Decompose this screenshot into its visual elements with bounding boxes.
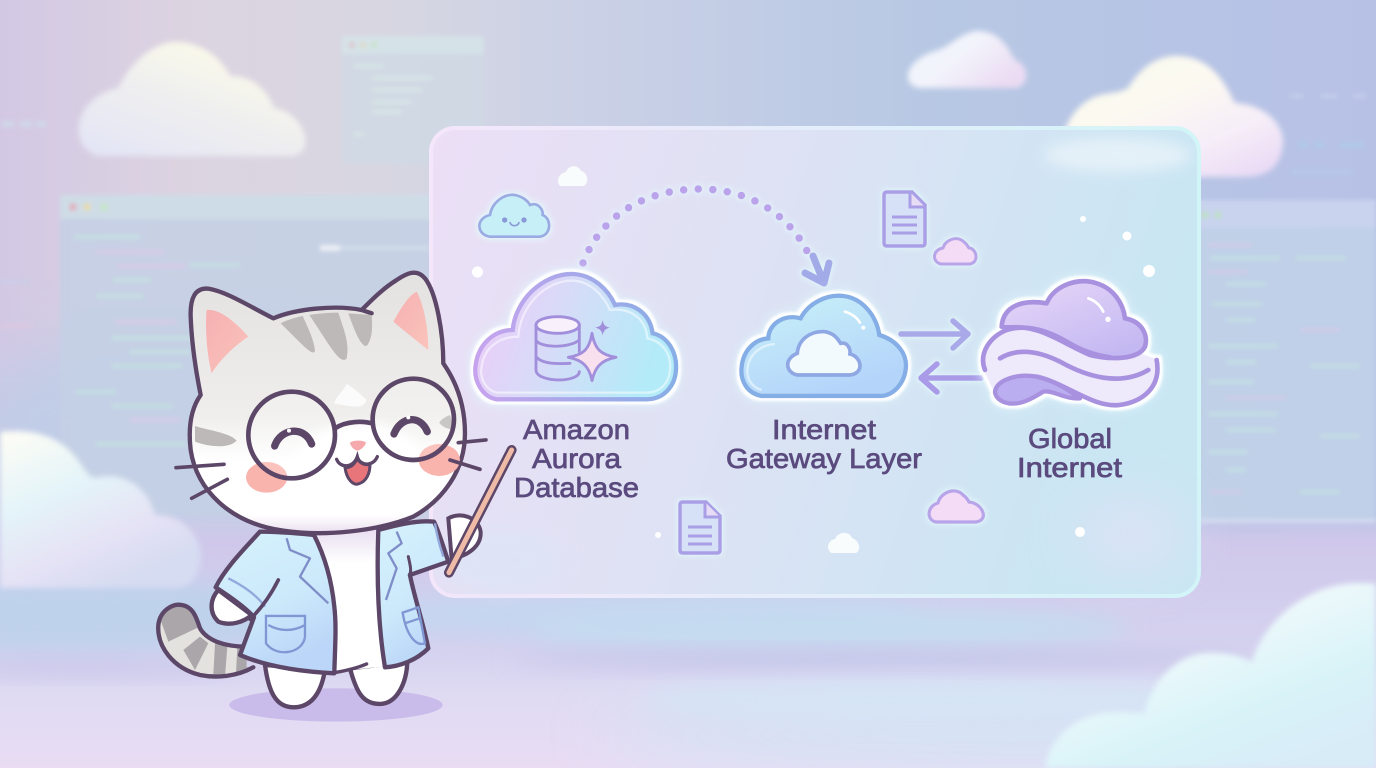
label: Internet Gateway Layer <box>726 414 922 474</box>
icon: small white cloud top <box>558 166 587 186</box>
blurred code fragments: far left <box>0 124 46 380</box>
cat tail <box>153 600 257 677</box>
inner highlight: database cloud <box>481 281 670 393</box>
cat torso <box>310 527 387 672</box>
cat muzzle highlight <box>293 423 427 510</box>
icon: small sparkle <box>595 320 610 335</box>
blurred code window: right <box>1190 200 1376 523</box>
label: Amazon Aurora Database: Amazon <box>523 414 630 445</box>
forehead white tuft <box>334 384 367 407</box>
label: Internet Gateway Layer: Gateway Layer <box>726 443 922 474</box>
arrow: gateway to internet <box>901 321 968 348</box>
icon: document bottom <box>680 502 720 553</box>
icon: database cylinder <box>536 317 579 380</box>
node: Global Internet cloud with wind swirls <box>983 281 1157 405</box>
label: Amazon Aurora Database: Database <box>514 472 639 503</box>
icon: small white cloud bottom <box>828 533 859 553</box>
cat eye right <box>394 415 427 434</box>
cat left paw <box>212 590 252 624</box>
cat cheeks <box>246 444 460 493</box>
icon: gloss on gateway cloud <box>845 312 860 323</box>
icon: document top <box>884 192 925 246</box>
ground shadow <box>229 688 443 722</box>
icon: smiling cloud <box>479 195 549 237</box>
forehead outline accent <box>362 310 372 313</box>
glass panel <box>431 128 1199 596</box>
label: Amazon Aurora Database <box>514 414 639 503</box>
label: Global Internet <box>1017 423 1122 483</box>
cat hand <box>448 515 481 558</box>
label: Global Internet: Global <box>1028 423 1112 454</box>
cat whiskers <box>176 440 486 498</box>
background cloud: bottom right <box>1045 583 1376 768</box>
cat mascot <box>153 273 512 722</box>
icon: inner white cloud <box>788 332 860 375</box>
label: Internet Gateway Layer: Internet <box>772 414 876 445</box>
cat ear right <box>393 292 428 350</box>
cat mouth <box>337 457 377 484</box>
label: Amazon Aurora Database: Aurora <box>532 443 621 474</box>
lab coat right <box>378 521 448 667</box>
node: Internet Gateway Layer cloud <box>741 296 906 396</box>
blurred code window: top <box>342 36 484 164</box>
background cloud: top left <box>79 42 305 156</box>
label: Global Internet: Internet <box>1017 452 1122 483</box>
cat legs <box>265 662 407 707</box>
blurred code window: left <box>60 195 435 515</box>
icon: pink cloud top right <box>934 239 976 264</box>
dotted arc arrow <box>583 189 829 283</box>
cat ear left <box>206 310 248 373</box>
background cloud: top right <box>1059 56 1283 177</box>
arrow: internet to gateway <box>921 364 981 392</box>
node: Amazon Aurora Database cloud <box>475 274 676 399</box>
background cloud: left <box>0 431 201 588</box>
cat eye left <box>275 429 312 446</box>
inner highlight: gateway cloud <box>747 344 775 390</box>
cat head <box>190 273 465 533</box>
lab coat left <box>216 532 367 673</box>
icon: pink cloud bottom <box>929 491 983 522</box>
cat nose <box>350 441 366 451</box>
cat glasses <box>248 379 454 478</box>
background cloud: top centre right <box>908 31 1026 88</box>
decorative sparkle dots <box>472 216 1155 538</box>
icon: large sparkle <box>568 333 616 381</box>
cat stripes <box>195 313 452 446</box>
blurred code fragments: top right <box>1290 96 1366 172</box>
icon: gloss on internet cloud <box>1088 298 1103 312</box>
pointer stick <box>449 450 512 573</box>
